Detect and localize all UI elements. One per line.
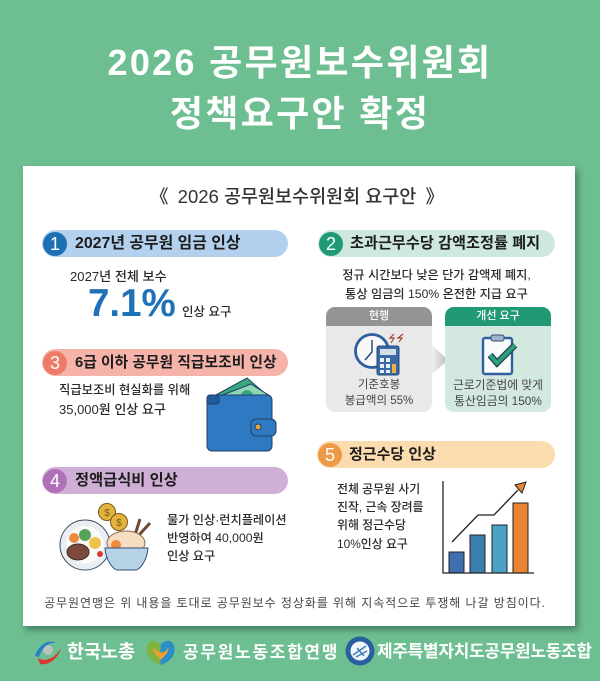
icon: meal and coins: $: [104, 508, 110, 519]
panel: main card: [23, 166, 575, 626]
title: 정책요구안 확정: [170, 93, 430, 134]
text: overtime demand: 통상 임금의 150% 온전한 지급 요구: [345, 287, 528, 301]
heading pill 1: 1: [50, 234, 60, 254]
heading pill 2: 초과근무수당 감액조정률 폐지: [350, 235, 540, 252]
label: current: [326, 307, 432, 326]
icon: clock and calculator: [354, 333, 404, 376]
text: overtime demand: [342, 268, 531, 301]
card heading: 《 2026 공무원보수위원회 요구안 》: [150, 186, 444, 207]
heading pill 1: 2027년 공무원 임금 인상: [75, 235, 241, 252]
text: improved rate: 근로기준법에 맞게: [453, 378, 543, 392]
section 2: overtime: [318, 230, 555, 412]
text: current rate: 봉급액의 55%: [345, 395, 413, 407]
text: meal allowance: 반영하여 40,000원: [167, 531, 264, 545]
text: Jeju union name: 제주특별자치도공무원노동조합: [377, 642, 592, 661]
text: regular allowance: 전체 공무원 사기: [337, 482, 420, 496]
heading pill 2: 2: [326, 234, 336, 254]
heading pill 2: [318, 230, 555, 257]
heading pill 4: 정액급식비 인상: [75, 472, 178, 489]
closing statement: 공무원연맹은 위 내용을 토대로 공무원보수 정상화를 위해 지속적으로 투쟁해 나갈 방침이다.: [44, 596, 546, 610]
text: allowance: 직급보조비 현실화를 위해: [59, 383, 190, 397]
text: union name: 한국노총: [67, 641, 135, 662]
title: [108, 42, 492, 134]
text: regular allowance: 진작, 근속 장려를: [337, 500, 424, 514]
text: improved rate: [453, 378, 543, 408]
section 4: meal: [42, 467, 288, 570]
icon: meal and coins: $: [116, 518, 122, 529]
icon: clipboard check: [482, 334, 518, 376]
footer logos: [35, 636, 592, 666]
title: 2026 공무원보수위원회: [108, 42, 492, 83]
text: current rate: [345, 378, 413, 407]
text: federation name: 공무원노동조합연맹: [183, 643, 339, 662]
icon: federation heart: [146, 640, 174, 665]
logo: Korean union: [35, 641, 135, 664]
heading pill 1: [42, 230, 288, 257]
heading pill 3: [42, 349, 288, 376]
text: allowance: 35,000원 인상 요구: [59, 402, 166, 417]
bar chart with arrow: [442, 481, 534, 574]
text: meal allowance: 인상 요구: [167, 549, 215, 563]
text: regular allowance: 위해 정근수당: [337, 518, 406, 532]
label: current: 현행: [369, 310, 389, 322]
heading pill 5: [317, 441, 555, 468]
section 3: allowance: [42, 349, 288, 452]
text: regular allowance: 10%인상 요구: [337, 537, 408, 551]
text: overtime demand: 정규 시간보다 낮은 단가 감액제 폐지,: [342, 268, 531, 282]
text: meal allowance: 물가 인상·런치플레이션: [167, 513, 287, 527]
heading pill 5: 정근수당 인상: [349, 446, 436, 463]
figure: 7.1%: 7.1%: [88, 282, 176, 325]
section 5: regular allowance: [317, 441, 555, 574]
logo: federation: [146, 640, 339, 665]
text: total pay: 2027년 전체 보수: [70, 269, 167, 284]
heading pill 3: 3: [50, 352, 60, 372]
icon: Jeju emblem: [346, 636, 374, 666]
panel: improvement: [445, 307, 551, 412]
text: meal allowance: [167, 513, 287, 563]
heading pill 4: [42, 467, 288, 494]
text: improved rate: 통산임금의 150%: [454, 394, 542, 408]
label: improvement: [445, 307, 551, 326]
heading pill 4: 4: [50, 470, 60, 490]
label: improvement: 개선 요구: [476, 310, 520, 322]
heading pill 5: 5: [325, 444, 335, 464]
icon: wallet: [206, 377, 276, 452]
heading pill 3: 6급 이하 공무원 직급보조비 인상: [75, 355, 277, 371]
text: raise demand: 인상 요구: [182, 305, 231, 319]
icon: union emblem: [35, 642, 61, 664]
panel: current: [326, 307, 432, 412]
logo: Jeju union: [346, 636, 592, 666]
text: regular allowance: [337, 482, 424, 551]
section 1: wage: [42, 230, 288, 325]
icon: meal and coins: [60, 503, 151, 570]
arrow: to improvement: [432, 346, 445, 374]
text: current rate: 기준호봉: [358, 379, 400, 391]
text: allowance: [59, 383, 190, 417]
